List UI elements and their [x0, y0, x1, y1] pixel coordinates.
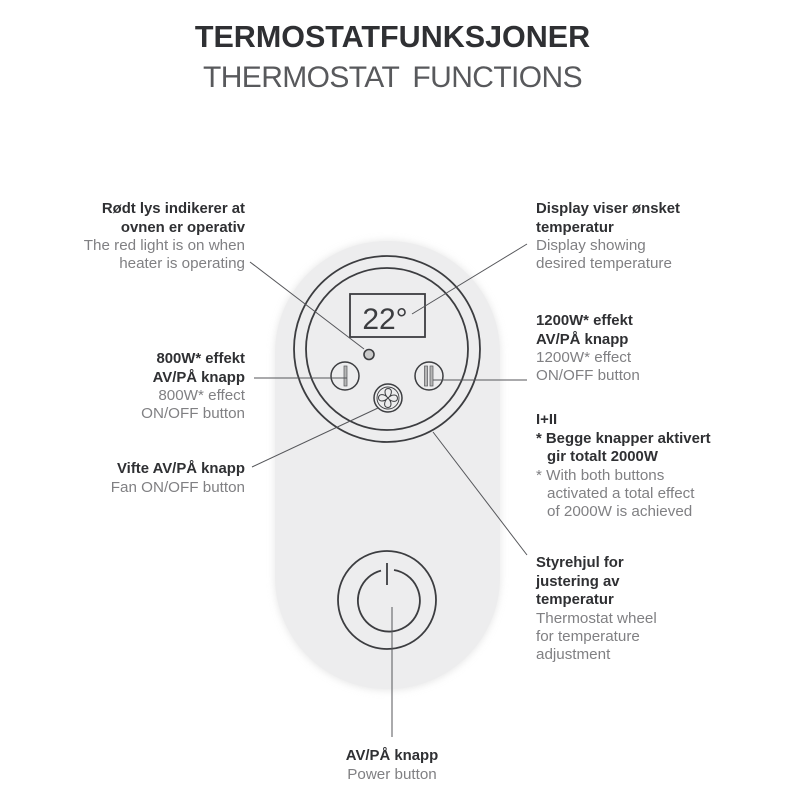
label: display: Display showing	[536, 237, 646, 254]
label: red light: The red light is on when	[84, 237, 245, 254]
label: 800W	[141, 351, 245, 422]
display with temperature: 22°	[362, 303, 408, 336]
label: wheel: justering av	[536, 574, 620, 590]
display with temperature	[350, 294, 425, 337]
label: combined effect: of 2000W is achieved	[547, 503, 692, 520]
label: display: desired temperature	[536, 255, 672, 272]
label: red light: ovnen er operativ	[121, 220, 245, 236]
title: English: THERMOSTAT FUNCTIONS	[203, 61, 582, 94]
label: combined effect: * With both buttons	[536, 467, 664, 484]
label: power: AV/PÅ knapp	[346, 748, 438, 764]
label: combined effect: gir totalt 2000W	[547, 449, 658, 465]
label: wheel	[536, 555, 657, 663]
label: wheel: for temperature	[536, 628, 640, 645]
label: wheel: temperatur	[536, 592, 614, 608]
label: fan: Vifte AV/PÅ knapp	[117, 461, 245, 477]
label: wheel: Thermostat wheel	[536, 610, 657, 627]
label: wheel: adjustment	[536, 646, 610, 663]
label: display: temperatur	[536, 220, 614, 236]
label: combined effect: I+II	[536, 412, 557, 428]
label: 1200W	[536, 313, 640, 384]
label: 800W: 800W* effekt	[156, 351, 245, 367]
control wheel rings	[294, 256, 480, 442]
fan button	[374, 384, 402, 412]
label: 800W: 800W* effect	[158, 387, 245, 404]
label: power: Power button	[347, 766, 437, 783]
label: red light: heater is operating	[119, 255, 245, 272]
title: Norwegian: TERMOSTATFUNKSJONER	[195, 20, 590, 54]
label: red light	[84, 201, 245, 272]
leader lines	[250, 244, 527, 737]
label: combined effect: * Begge knapper aktivert	[536, 431, 711, 447]
label: combined effect: activated a total effect	[547, 485, 694, 502]
label: power	[346, 747, 438, 783]
label: 1200W: ON/OFF button	[536, 367, 640, 384]
800W button	[331, 362, 359, 390]
label: display: Display viser ønsket	[536, 201, 680, 217]
label: 1200W: 1200W* effekt	[536, 313, 633, 329]
thermostat body panel	[275, 241, 500, 690]
label: combined effect	[536, 412, 711, 520]
label: 800W: AV/PÅ knapp	[153, 370, 245, 386]
label: display	[536, 201, 680, 272]
label: wheel: Styrehjul for	[536, 555, 624, 571]
label: fan	[111, 460, 245, 496]
1200W button	[415, 362, 443, 390]
label: fan: Fan ON/OFF button	[111, 479, 245, 496]
label: 1200W: AV/PÅ knapp	[536, 332, 628, 348]
label: red light: Rødt lys indikerer at	[102, 201, 245, 217]
label: 800W: ON/OFF button	[141, 405, 245, 422]
power button	[338, 551, 436, 649]
label: 1200W: 1200W* effect	[536, 349, 631, 366]
red light indicator	[364, 350, 374, 360]
